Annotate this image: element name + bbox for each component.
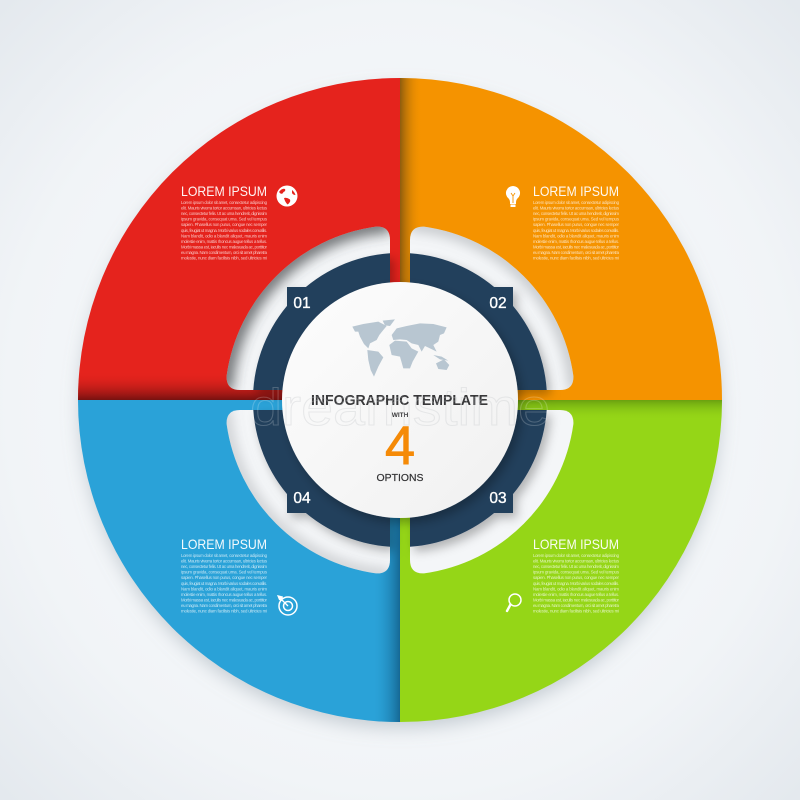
text block: option 4: nec, consectetur felis. Ut ac urna hendrerit, dignissim [181,564,267,569]
text block: option 3: nec, consectetur felis. Ut ac urna hendrerit, dignissim [533,564,619,569]
icon: world map [352,319,449,377]
text block: option 3: ipsum gravida, consequat urna. Sed vel tempus [533,570,620,575]
text block: option 4: eu magna. Nam condimentum, orci sit amet pharetra [181,603,268,608]
text block: option 2: elit. Mauris viverra tortor accumsan, ultricies lectus [533,206,620,211]
text block: option 3 [533,553,620,614]
text block: option 1: Morbi massa est, iaculis nec malesuada ac, porttitor [181,244,268,249]
heading: option 1: LOREM IPSUM [181,184,267,199]
text block: option 1: sapien. Phasellus non purus, congue nec semper [181,222,268,227]
number 04: 04 [293,490,311,507]
text block: option 1: eu magna. Nam condimentum, orci sit amet pharetra [181,250,268,255]
text block: option 2: nec, consectetur felis. Ut ac urna hendrerit, dignissim [533,211,619,216]
text block: option 2: ipsum gravida, consequat urna. Sed vel tempus [533,217,620,222]
text block: option 2: molestie, nunc diam facilisis nibh, sed ultricies mi [533,256,619,260]
text block: option 1: elit. Mauris viverra tortor accumsan, ultricies lectus [181,206,268,211]
text block: option 2: Lorem ipsum dolor sit amet, consectetur adipiscing [533,200,620,205]
icon: globe [276,186,298,206]
panel: white cutouts [220,220,580,580]
label: with: WITH [392,412,409,419]
text block: option 3: Morbi massa est, iaculis nec malesuada ac, porttitor [533,597,620,602]
heading: option 3: LOREM IPSUM [533,537,619,552]
watermark on ring: dreamstime [250,379,550,437]
text block: option 3: quis, feugiat ut magna. Morbi varius sodales convallis. [533,581,619,586]
text block: option 1: Lorem ipsum dolor sit amet, consectetur adipiscing [181,200,268,205]
number 03: 03 [489,490,507,507]
text block: option 3: sapien. Phasellus non purus, congue nec semper [533,575,620,580]
number 02: 02 [489,295,507,312]
text block: option 1: nec, consectetur felis. Ut ac urna hendrerit, dignissim [181,211,267,216]
text block: option 4: quis, feugiat ut magna. Morbi varius sodales convallis. [181,581,267,586]
text block: option 1: molestie, nunc diam facilisis nibh, sed ultricies mi [181,256,267,260]
text block: option 3: Lorem ipsum dolor sit amet, consectetur adipiscing [533,553,620,558]
text block: option 1: molestie enim, mattis rhoncus augue tellus a tellus. [181,239,267,244]
text block: option 2: Morbi massa est, iaculis nec malesuada ac, porttitor [533,244,620,249]
heading: option 4: LOREM IPSUM [181,537,267,552]
center circle [282,282,518,518]
label: options: OPTIONS [376,472,424,484]
navy ring with number tabs [253,253,547,547]
icon: target [277,595,297,615]
text block: option 4: ipsum gravida, consequat urna. Sed vel tempus [181,570,268,575]
text block: option 2: Nam blandit, odio a blandit aliquet, mauris enim [533,233,619,238]
text block: option 4: elit. Mauris viverra tortor accumsan, ultricies lectus [181,559,268,564]
text block: option 3: elit. Mauris viverra tortor accumsan, ultricies lectus [533,559,620,564]
panel: option 1 red quadrant [78,78,400,400]
text block: option 4: sapien. Phasellus non purus, congue nec semper [181,575,268,580]
text block: option 2 [533,200,620,260]
text block: option 1: Nam blandit, odio a blandit aliquet, mauris enim [181,233,267,238]
text block: option 3: molestie enim, mattis rhoncus augue tellus a tellus. [533,592,619,597]
outer circle shadow [80,88,720,728]
text block: option 3: eu magna. Nam condimentum, orci sit amet pharetra [533,603,620,608]
text block: option 4: Nam blandit, odio a blandit aliquet, mauris enim [181,586,267,591]
text block: option 4: Morbi massa est, iaculis nec malesuada ac, porttitor [181,597,268,602]
watermark on center circle: dreamstime [250,379,550,437]
big number 4: 4 [385,416,415,476]
text block: option 3: molestie, nunc diam facilisis nibh, sed ultricies mi [533,608,619,614]
text block: option 4: molestie enim, mattis rhoncus augue tellus a tellus. [181,592,267,597]
heading: option 2: LOREM IPSUM [533,184,619,199]
icon: magnifier [507,594,521,611]
text block: option 1: ipsum gravida, consequat urna. Sed vel tempus [181,217,268,222]
text block: option 2: sapien. Phasellus non purus, congue nec semper [533,222,620,227]
text block: option 4: Lorem ipsum dolor sit amet, consectetur adipiscing [181,553,268,558]
text block: option 2: eu magna. Nam condimentum, orci sit amet pharetra [533,250,620,255]
panel: option 3 green quadrant [400,400,722,722]
number 01: 01 [293,295,311,312]
icon: light bulb [506,186,520,207]
text block: option 2: quis, feugiat ut magna. Morbi varius sodales convallis. [533,228,619,233]
text block: option 2: molestie enim, mattis rhoncus augue tellus a tellus. [533,239,619,244]
text block: option 4: molestie, nunc diam facilisis nibh, sed ultricies mi [181,608,267,614]
panel: option 2 orange quadrant [400,78,722,400]
panel: option 4 blue quadrant [78,400,400,722]
text block: option 4 [181,553,268,614]
text block: option 3: Nam blandit, odio a blandit aliquet, mauris enim [533,586,619,591]
title: infographic template: INFOGRAPHIC TEMPLATE [311,392,488,409]
text block: option 1 [181,200,268,260]
text block: option 1: quis, feugiat ut magna. Morbi varius sodales convallis. [181,228,267,233]
